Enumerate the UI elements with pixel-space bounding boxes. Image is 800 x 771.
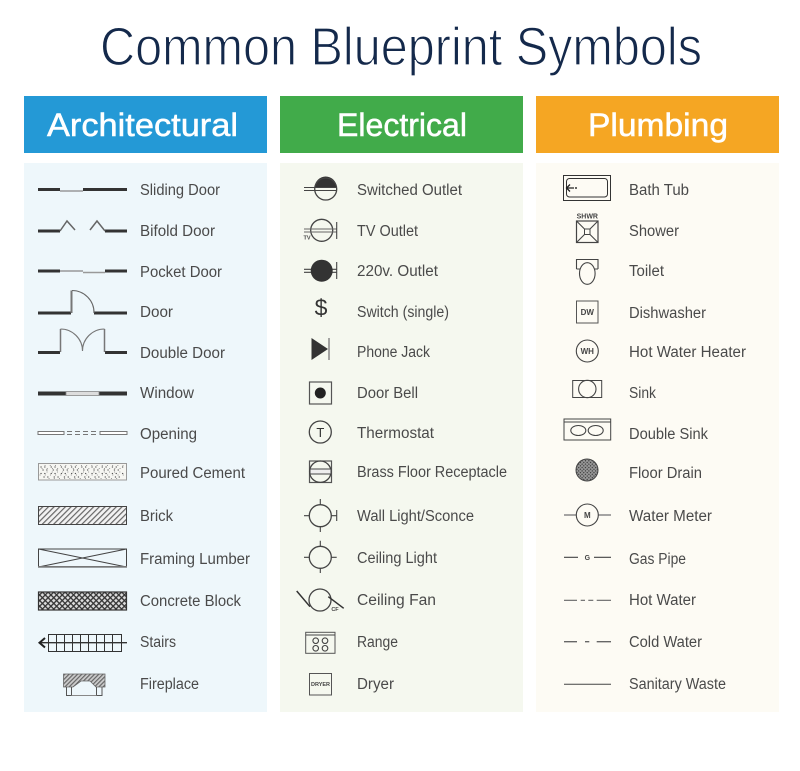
row: hot water heater: WH: [581, 347, 594, 356]
row: ceiling light: [304, 541, 438, 573]
row: brick: [38, 506, 173, 525]
row: dishwasher: DW: [581, 308, 594, 317]
row: shower: Shower: [629, 223, 679, 240]
row: tv outlet: [303, 219, 419, 242]
row: thermostat: T: [316, 425, 324, 440]
row: hot water heater: Hot Water Heater: [629, 344, 746, 361]
row: sink: [573, 380, 656, 402]
panel body: architectural: [24, 163, 267, 712]
row: water meter: Water Meter: [629, 508, 712, 525]
row: concrete block: [38, 592, 241, 610]
row: concrete block: Concrete Block: [140, 593, 241, 610]
row: phone jack: Phone Jack: [357, 344, 430, 361]
row: window: [38, 385, 195, 402]
row: tv outlet: TV Outlet: [357, 223, 419, 240]
heading: electrical: [280, 96, 523, 153]
row: thermostat: Thermostat: [357, 425, 435, 442]
panel body: electrical: [280, 163, 523, 712]
row: floor drain: [576, 459, 702, 482]
row: gas pipe: G: [585, 555, 591, 562]
row: opening: Opening: [140, 426, 197, 443]
row: switch: Switch (single): [357, 304, 449, 321]
row: water meter: [564, 504, 712, 526]
row: hot water: Hot Water: [629, 592, 696, 609]
row: phone jack: [312, 338, 430, 361]
row: wall light / sconce: [304, 499, 474, 532]
row: tv outlet: TV: [303, 236, 311, 242]
row: dryer: DRYER: [311, 682, 330, 688]
row: opening: [38, 426, 197, 443]
row: double door: [38, 329, 225, 362]
row: door: [38, 290, 173, 321]
row: ceiling fan: [297, 589, 436, 613]
row: bifold door: Bifold Door: [140, 223, 215, 240]
row: shower: SHWR: [577, 214, 598, 220]
row: 220v outlet: [304, 260, 439, 282]
row: bifold door: [38, 221, 215, 240]
panel body: plumbing: [536, 163, 779, 712]
row: cold water: Cold Water: [629, 634, 702, 651]
row: stairs: [39, 634, 176, 652]
row: door bell: [310, 382, 418, 404]
heading: architectural: Architectural: [47, 107, 238, 143]
row: pocket door: Pocket Door: [140, 264, 222, 281]
row: window: Window: [140, 385, 195, 402]
panel: plumbing: [536, 96, 779, 712]
row: door bell: Door Bell: [357, 385, 418, 402]
row: dryer: [310, 674, 394, 695]
row: 220v outlet: 220v. Outlet: [357, 263, 439, 280]
row: water meter: M: [584, 511, 591, 520]
row: double sink: Double Sink: [629, 426, 708, 443]
row: framing lumber: Framing Lumber: [140, 551, 250, 568]
panel: electrical: [280, 96, 523, 712]
row: door: Door: [140, 304, 173, 321]
row: switch: $: [315, 294, 328, 320]
row: poured cement: [38, 464, 246, 482]
row: bath tub: Bath Tub: [629, 182, 689, 199]
title: Common Blueprint Symbols: [100, 17, 702, 77]
heading: electrical: Electrical: [337, 107, 467, 143]
row: sanitary waste: Sanitary Waste: [629, 676, 726, 693]
row: fireplace: Fireplace: [140, 676, 199, 693]
row: wall light / sconce: Wall Light/Sconce: [357, 508, 474, 525]
row: hot water: [564, 592, 696, 609]
row: ceiling fan: Ceiling Fan: [357, 592, 436, 609]
row: brass floor receptacle: [310, 461, 507, 482]
row: ceiling fan: CF: [331, 607, 339, 613]
row: double door: Double Door: [140, 345, 225, 362]
row: cold water: [564, 634, 702, 651]
row: switch: [315, 294, 449, 321]
row: double sink: [564, 419, 708, 443]
row: gas pipe: [564, 551, 686, 568]
row: dryer: Dryer: [357, 676, 394, 693]
heading: plumbing: Plumbing: [588, 107, 728, 143]
row: dishwasher: [576, 301, 706, 323]
row: shower: [576, 214, 679, 242]
row: bath tub: [564, 176, 689, 200]
row: switched outlet: [304, 177, 463, 200]
row: framing lumber: [38, 549, 250, 568]
row: brick: Brick: [140, 508, 173, 525]
row: sliding door: Sliding Door: [140, 182, 220, 199]
row: brass floor receptacle: Brass Floor Receptacle: [357, 464, 507, 481]
row: dishwasher: Dishwasher: [629, 305, 706, 322]
heading: plumbing: [536, 96, 779, 153]
row: range: Range: [357, 634, 398, 651]
row: ceiling light: Ceiling Light: [357, 550, 438, 567]
row: fireplace: [64, 674, 199, 696]
row: thermostat: [309, 421, 435, 443]
row: sink: Sink: [629, 385, 656, 402]
row: switched outlet: Switched Outlet: [357, 182, 463, 199]
row: gas pipe: Gas Pipe: [629, 551, 686, 568]
row: floor drain: Floor Drain: [629, 465, 702, 482]
heading: architectural: [24, 96, 267, 153]
panel: architectural: [24, 96, 267, 712]
row: hot water heater: [576, 340, 746, 362]
row: poured cement: Poured Cement: [140, 465, 246, 482]
row: toilet: Toilet: [629, 263, 665, 280]
row: toilet: [576, 260, 665, 284]
row: stairs: Stairs: [140, 634, 176, 651]
row: range: [306, 632, 398, 653]
